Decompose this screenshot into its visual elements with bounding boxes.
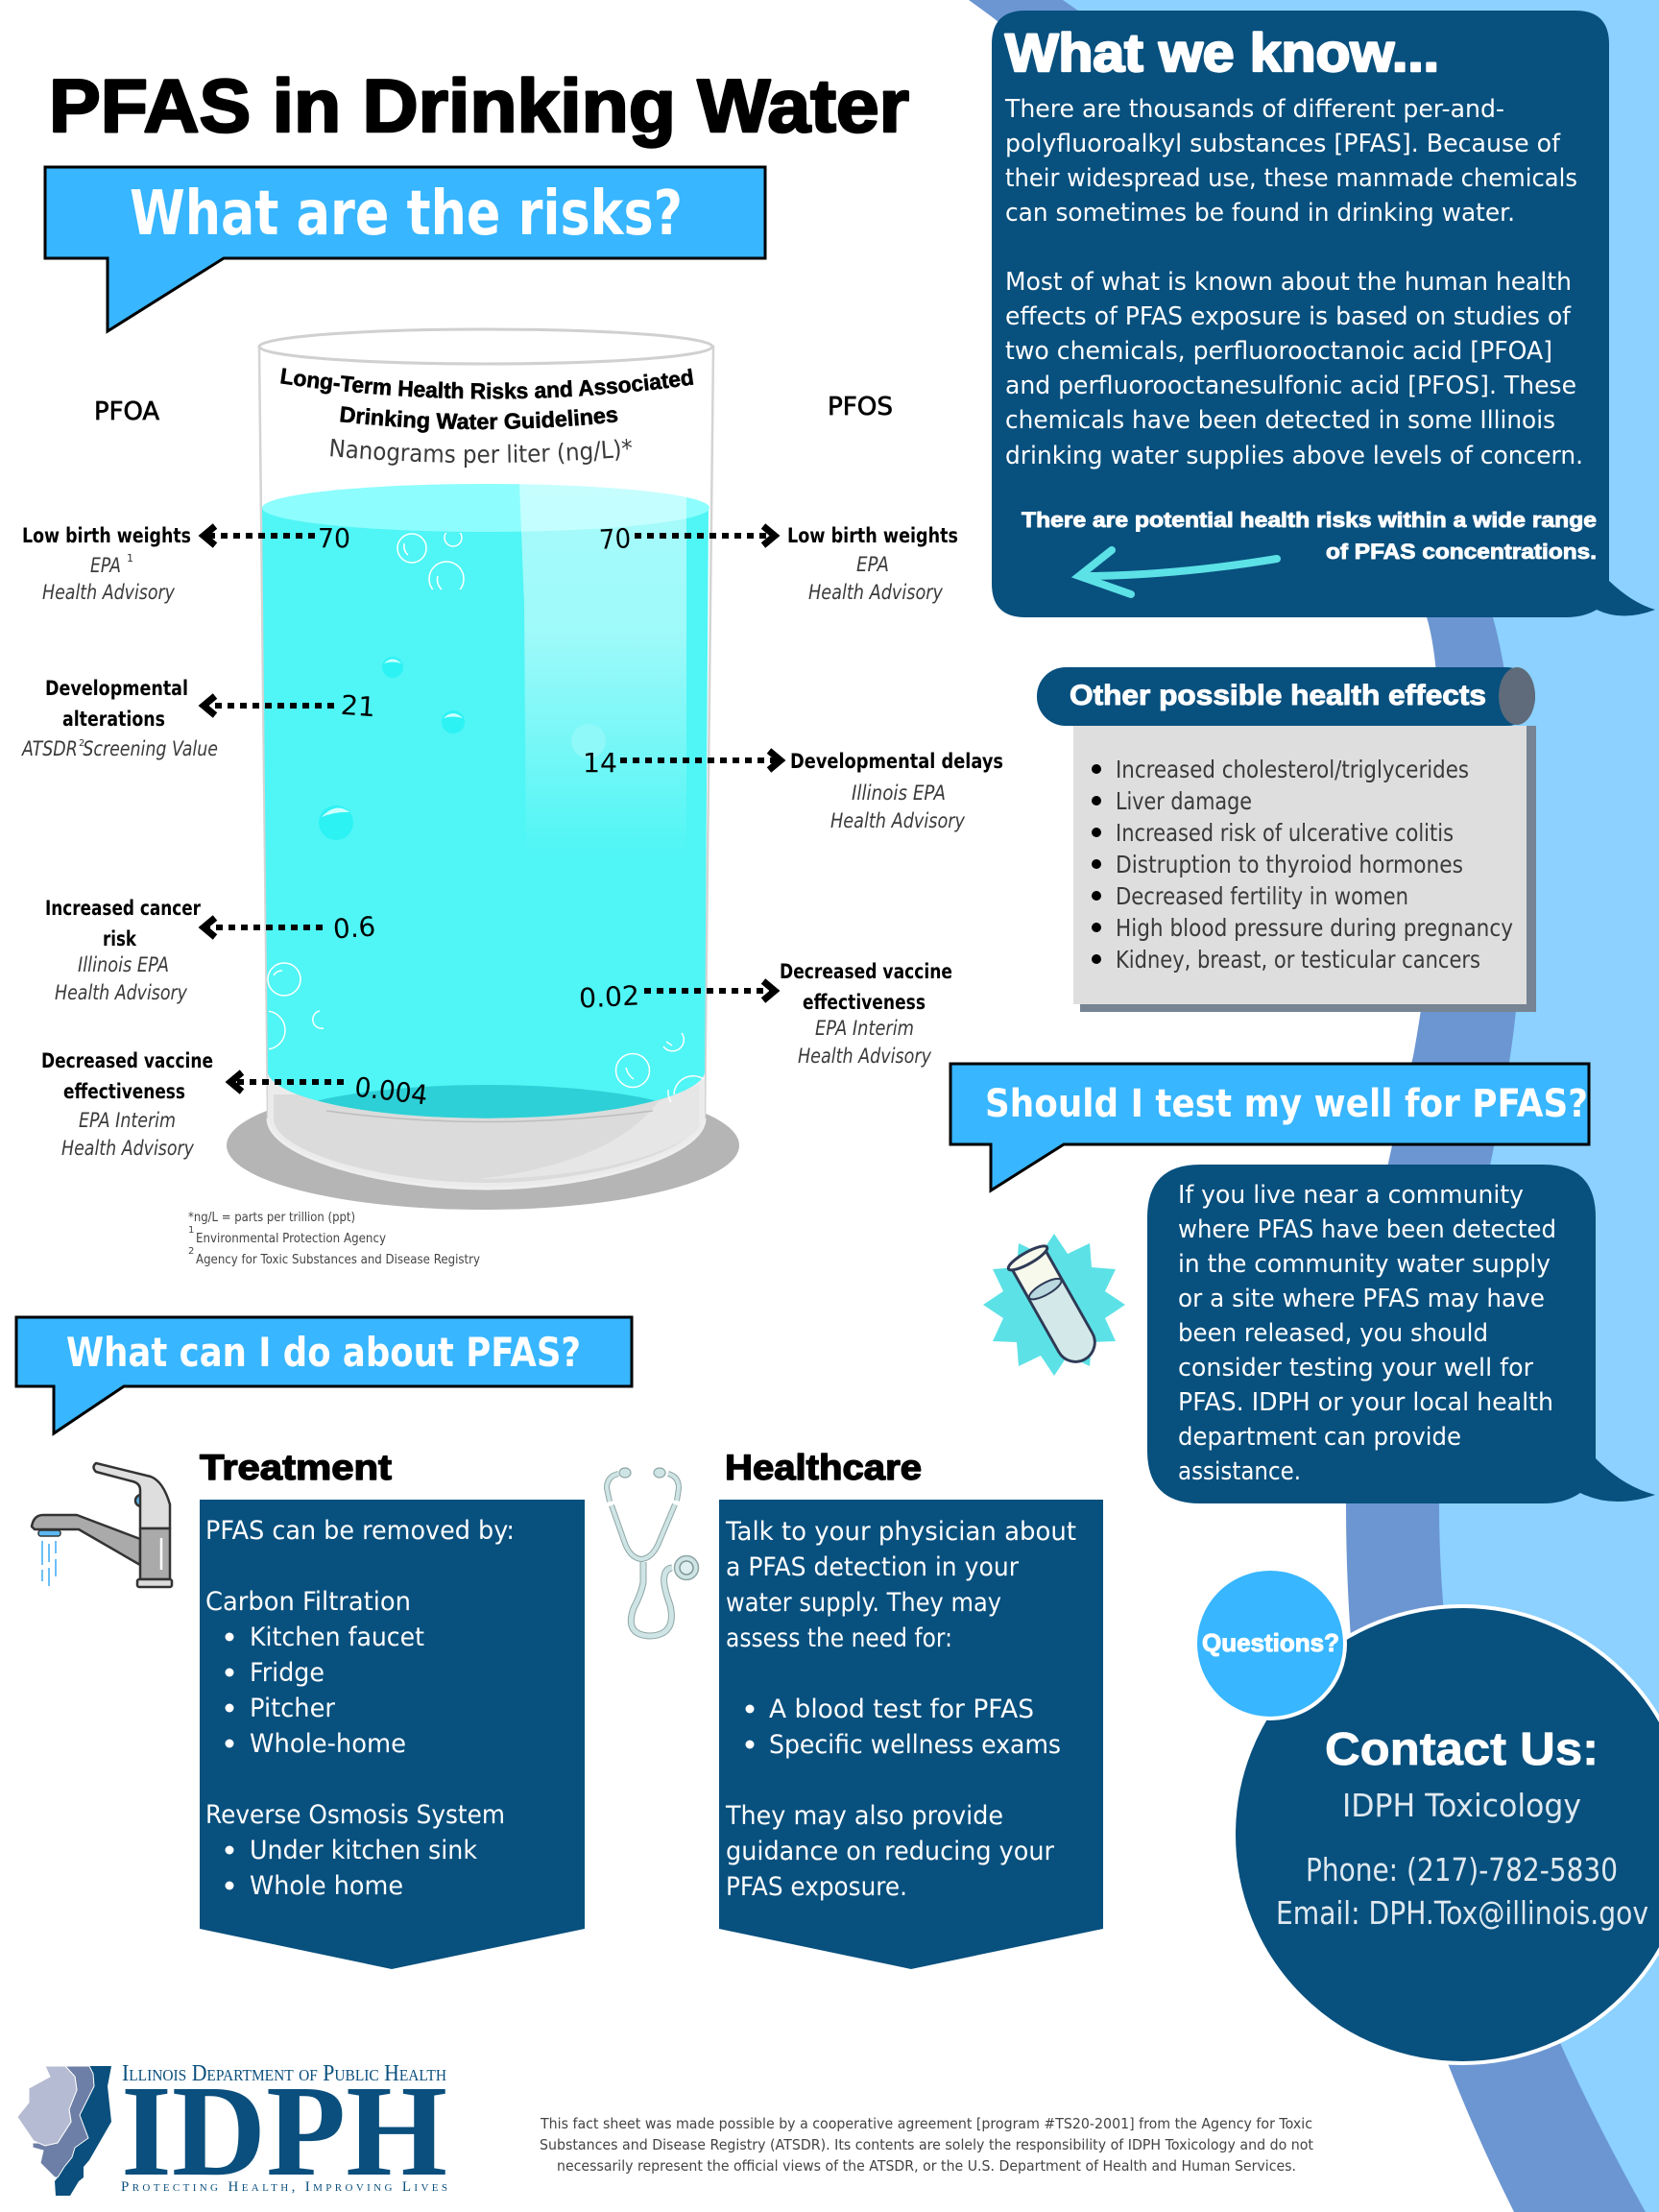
callout: should I test my well xyxy=(950,1064,1589,1190)
panel: what we know: What we know... xyxy=(1005,22,1439,83)
values: 0.02 xyxy=(578,979,640,1015)
panel: test well guidance: consider testing your well for xyxy=(1178,1354,1533,1382)
PFOA labels: ATSDR Screening Value xyxy=(20,737,218,760)
panel: other possible health effects: Other possible health effects xyxy=(1070,680,1486,711)
panel: other possible health effects xyxy=(1037,667,1536,1012)
values xyxy=(318,522,640,1112)
footnotes: Agency for Toxic Substances and Disease Registry xyxy=(196,1253,480,1267)
glass body xyxy=(259,347,713,1118)
footnotes: 1 xyxy=(188,1225,194,1236)
panel: treatment: Whole-home xyxy=(250,1729,406,1759)
PFOA labels: alterations xyxy=(62,708,165,731)
panel: healthcare: assess the need for: xyxy=(726,1623,952,1653)
PFOS labels: EPA xyxy=(856,553,889,576)
glass of water chart xyxy=(227,329,739,1210)
panel: test well guidance xyxy=(1147,1165,1655,1503)
footer disclaimer: necessarily represent the official views of the ATSDR, or the U.S. Department of Health and Human Services. xyxy=(557,2157,1296,2175)
panel: other possible health effects: Decreased fertility in women xyxy=(1116,882,1408,910)
panel: what we know: polyfluoroalkyl substances [PFAS]. Because of xyxy=(1005,130,1561,158)
PFOS labels: Developmental delays xyxy=(790,750,1003,773)
glass heading: Nanograms per liter (ng/L)* xyxy=(330,439,632,469)
logo: IDPH: Illinois Department of Public Health xyxy=(122,2061,446,2086)
glass heading xyxy=(280,368,693,469)
panel: what we know: of PFAS concentrations. xyxy=(1326,540,1597,564)
values: 70 xyxy=(318,522,350,554)
panel: treatment xyxy=(200,1500,585,1969)
panel: test well guidance: in the community water supply xyxy=(1178,1250,1551,1279)
logo: IDPH: IDPH xyxy=(121,2059,447,2203)
callout: should I test my well: Should I test my well for PFAS? xyxy=(985,1082,1588,1126)
footnotes: *ng/L = parts per trillion (ppt) xyxy=(188,1211,355,1225)
PFOA labels: 2 xyxy=(79,738,84,749)
panel: healthcare xyxy=(719,1500,1103,1969)
PFOA labels: Health Advisory xyxy=(42,581,175,604)
glass heading: Long-Term Health Risks and Associated xyxy=(280,368,693,399)
contact circle: IDPH Toxicology xyxy=(1342,1787,1581,1824)
values: 0.004 xyxy=(353,1071,429,1112)
panel: other possible health effects: Increased risk of ulcerative colitis xyxy=(1116,819,1454,847)
panel: what we know: their widespread use, these manmade chemicals xyxy=(1005,164,1577,193)
PFOA labels: EPA Interim xyxy=(79,1109,176,1132)
panel: what we know: Most of what is known about the human health xyxy=(1005,268,1572,297)
panel: what we know: effects of PFAS exposure is based on studies of xyxy=(1005,302,1572,331)
panel: what we know: can sometimes be found in drinking water. xyxy=(1005,199,1515,228)
values: 0.6 xyxy=(332,911,376,945)
panel: what we know: and perfluorooctanesulfonic acid [PFOS]. These xyxy=(1005,372,1576,400)
panel: what we know xyxy=(992,11,1655,617)
icon: test tube xyxy=(983,1234,1125,1376)
water surface xyxy=(262,484,709,532)
footer disclaimer: Substances and Disease Registry (ATSDR). Its contents are solely the responsibility of IDPH Toxicology and do not xyxy=(540,2136,1313,2153)
PFOA labels: effectiveness xyxy=(63,1080,185,1103)
PFOA labels: 1 xyxy=(127,552,133,565)
contact circle: Contact Us: xyxy=(1325,1724,1599,1775)
values: 14 xyxy=(583,747,617,779)
PFOA labels: Decreased vaccine xyxy=(41,1049,213,1072)
panel: test well guidance: assistance. xyxy=(1178,1457,1301,1486)
values: 21 xyxy=(340,689,376,723)
values: 70 xyxy=(598,522,632,556)
panel: test well guidance: been released, you should xyxy=(1178,1319,1488,1348)
PFOS labels: effectiveness xyxy=(803,991,926,1014)
PFOA labels: Health Advisory xyxy=(61,1137,194,1160)
PFOS labels: Illinois EPA xyxy=(852,781,946,805)
panel: treatment: Carbon Filtration xyxy=(205,1587,411,1617)
panel: what we know: There are potential health risks within a wide range xyxy=(1022,508,1597,532)
PFOA labels xyxy=(20,524,218,1160)
panel: treatment: PFAS can be removed by: xyxy=(205,1516,515,1546)
panel: test well guidance: If you live near a community xyxy=(1178,1181,1524,1210)
panel: healthcare: a PFAS detection in your xyxy=(726,1552,1020,1582)
title: PFAS in Drinking Water xyxy=(49,63,909,148)
panel: other possible health effects: Kidney, breast, or testicular cancers xyxy=(1116,946,1480,974)
callout: what can I do: What can I do about PFAS? xyxy=(66,1329,581,1376)
column label: PFOS: PFOS xyxy=(828,393,893,421)
PFOS labels: Health Advisory xyxy=(808,581,943,604)
logo: IDPH: Protecting Health, Improving Lives xyxy=(121,2179,447,2195)
footnotes xyxy=(188,1211,480,1267)
panel: treatment: Under kitchen sink xyxy=(250,1836,477,1865)
panel: treatment: Reverse Osmosis System xyxy=(205,1800,505,1830)
panel: healthcare: PFAS exposure. xyxy=(726,1872,907,1902)
panel: healthcare: A blood test for PFAS xyxy=(769,1695,1034,1724)
panel: treatment: Fridge xyxy=(250,1658,325,1688)
questions badge: Questions? xyxy=(1202,1628,1339,1657)
glass shadow xyxy=(227,1081,739,1210)
glass highlight xyxy=(519,483,686,854)
questions badge xyxy=(1195,1569,1345,1719)
panel: test well guidance: PFAS. IDPH or your local health xyxy=(1178,1388,1553,1417)
glass heading: Drinking Water Guidelines xyxy=(340,406,618,433)
callout: what are the risks xyxy=(45,167,765,331)
callout: what are the risks: What are the risks? xyxy=(130,179,683,250)
panel: healthcare: Talk to your physician about xyxy=(725,1517,1076,1547)
panel: healthcare: guidance on reducing your xyxy=(726,1837,1055,1866)
panel: other possible health effects: Increased cholesterol/triglycerides xyxy=(1116,756,1469,783)
panel: test well guidance: department can provide xyxy=(1178,1423,1461,1452)
panel: what we know: There are thousands of different per-and- xyxy=(1004,95,1504,124)
PFOA labels: Illinois EPA xyxy=(78,953,169,976)
panel: what we know: two chemicals, perfluorooctanoic acid [PFOA] xyxy=(1005,337,1552,366)
PFOA labels: Increased cancer xyxy=(45,897,202,920)
panel heading: Healthcare: Healthcare xyxy=(725,1448,922,1487)
PFOA labels: EPA xyxy=(90,554,121,577)
panel: healthcare: They may also provide xyxy=(725,1801,1003,1831)
panel: test well guidance: or a site where PFAS may have xyxy=(1178,1285,1545,1313)
panel heading: Treatment: Treatment xyxy=(200,1448,392,1487)
panel: healthcare: water supply. They may xyxy=(726,1588,1001,1618)
panel: other possible health effects: Distruption to thyroiod hormones xyxy=(1116,851,1463,878)
panel: treatment: Whole home xyxy=(250,1871,403,1901)
callout: what can I do xyxy=(16,1317,632,1433)
panel: other possible health effects: High blood pressure during pregnancy xyxy=(1116,914,1513,942)
footer disclaimer xyxy=(540,2115,1313,2175)
PFOA labels: Health Advisory xyxy=(55,981,187,1004)
panel: what we know: drinking water supplies above levels of concern. xyxy=(1005,442,1583,470)
PFOS labels: EPA Interim xyxy=(815,1017,914,1040)
background swoosh xyxy=(969,0,1659,2212)
PFOS labels: Decreased vaccine xyxy=(780,960,952,983)
panel: healthcare: Specific wellness exams xyxy=(769,1730,1061,1760)
glass rim xyxy=(259,329,712,364)
PFOS labels: Health Advisory xyxy=(798,1045,931,1068)
panel: treatment: Pitcher xyxy=(250,1694,336,1723)
PFOS labels xyxy=(780,524,1003,1068)
icon: stethoscope xyxy=(607,1468,699,1636)
icon: faucet xyxy=(32,1463,172,1587)
bubbles xyxy=(247,529,704,1102)
PFOS labels: Health Advisory xyxy=(830,809,965,832)
PFOA labels: Developmental xyxy=(45,677,188,700)
arrow xyxy=(1079,550,1277,594)
PFOS labels: Low birth weights xyxy=(787,524,958,547)
footnotes: Environmental Protection Agency xyxy=(196,1232,386,1246)
footer disclaimer: This fact sheet was made possible by a cooperative agreement [program #TS20-2001] from the Agency for Toxic xyxy=(540,2115,1312,2132)
dotted arrows xyxy=(204,526,781,1092)
panel: treatment: Kitchen faucet xyxy=(250,1623,424,1652)
column label: PFOA: PFOA xyxy=(94,397,159,426)
footnotes: 2 xyxy=(188,1246,194,1257)
panel: what we know: chemicals have been detected in some Illinois xyxy=(1005,406,1555,435)
contact circle xyxy=(1234,1606,1659,2063)
PFOA labels: Low birth weights xyxy=(22,524,191,547)
panel: test well guidance: where PFAS have been detected xyxy=(1178,1215,1556,1244)
water xyxy=(262,508,709,1118)
panel: other possible health effects: Liver damage xyxy=(1116,787,1252,815)
PFOA labels: risk xyxy=(103,927,137,950)
